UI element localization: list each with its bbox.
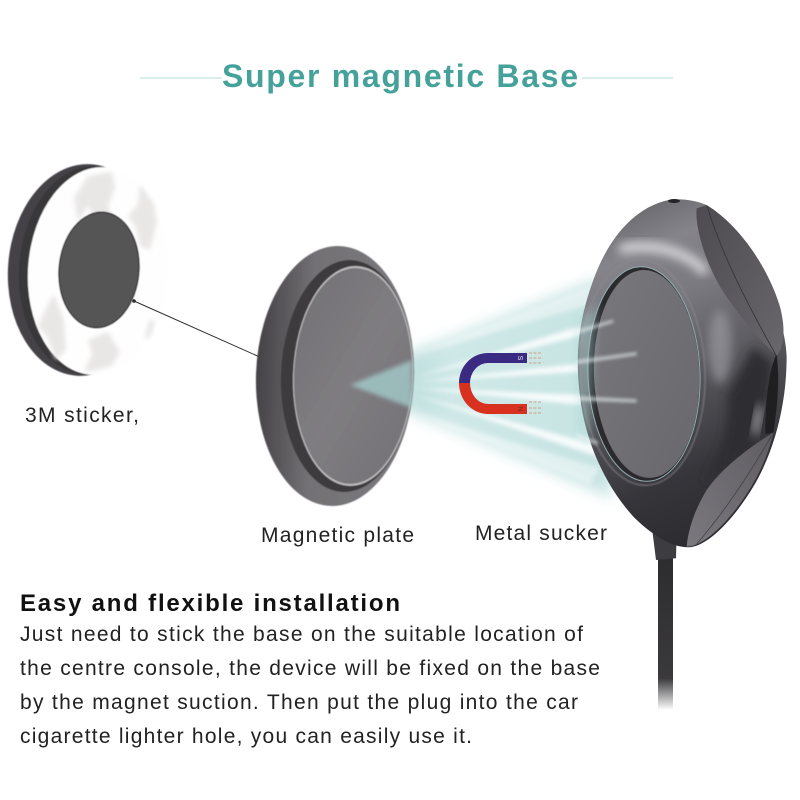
right shoulder highlight — [751, 403, 763, 437]
installation description: cigarette lighter hole, you can easily use it. — [20, 725, 472, 748]
connector line — [132, 299, 262, 358]
cable — [658, 552, 673, 710]
sticker white adhesive disc — [21, 162, 175, 380]
icon: horseshoe magnet: N — [516, 406, 523, 412]
right shoulder lighter area — [708, 310, 732, 383]
magnetic plate — [252, 243, 418, 509]
highlight above face — [623, 247, 703, 270]
icon: horseshoe magnet — [459, 353, 542, 414]
teal glow over device edge — [577, 303, 597, 443]
right notch — [765, 355, 778, 434]
magnet north arm — [459, 383, 527, 414]
cable neck — [653, 533, 677, 560]
plate outer flange — [252, 243, 418, 509]
device body — [578, 199, 787, 547]
title: Super magnetic Base — [222, 58, 578, 94]
sticker centre magnetic disc — [54, 209, 144, 331]
sticker dark rim — [1, 159, 167, 381]
3M watermark marks — [38, 172, 157, 372]
installation heading: Easy and flexible installation — [20, 590, 400, 617]
upper back wing — [696, 205, 784, 356]
icon: horseshoe magnet: S — [516, 356, 523, 361]
installation description: Just need to stick the base on the suitable location of — [20, 623, 583, 646]
rays on device — [577, 319, 637, 445]
face plate — [590, 268, 703, 480]
right shoulder shading — [703, 347, 773, 483]
installation description: by the magnet suction. Then put the plug into the car — [20, 691, 578, 714]
installation description: the centre console, the device will be fixed on the base — [20, 657, 600, 680]
beam glow on plate — [350, 360, 412, 408]
face bezel — [576, 258, 709, 487]
magnet south arm — [459, 353, 527, 383]
installation description — [20, 623, 600, 748]
3M sticker illustration — [1, 159, 175, 381]
lower back wing — [687, 433, 773, 547]
magnetic beams — [405, 278, 612, 498]
label: metal sucker: Metal sucker — [475, 522, 607, 545]
label: magnetic plate: Magnetic plate — [261, 524, 414, 547]
label: 3M sticker: 3M sticker, — [25, 404, 139, 427]
top screw hole — [668, 199, 680, 203]
light rays — [412, 286, 612, 484]
plate face — [290, 266, 416, 486]
metal sucker device — [576, 199, 787, 560]
